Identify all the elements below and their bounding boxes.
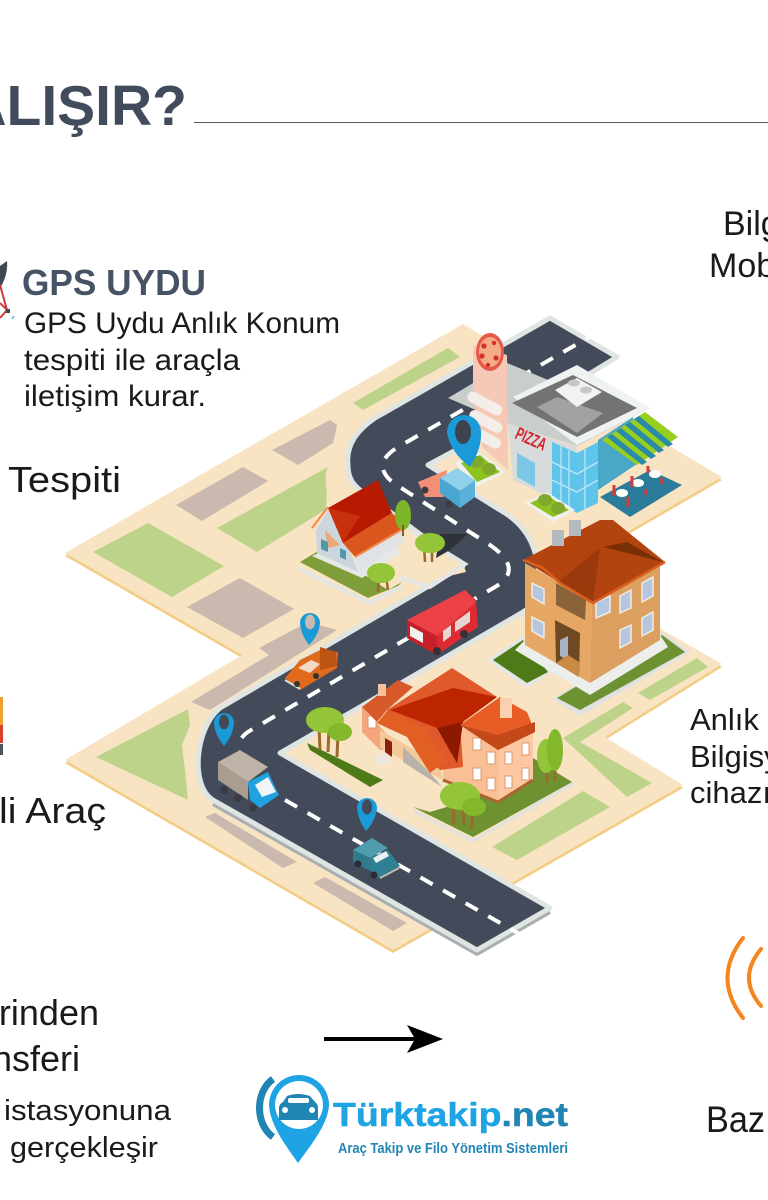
pizza sign text: PIZZA (512, 423, 550, 455)
arrow (324, 1025, 443, 1053)
left wall (525, 563, 592, 683)
pizza restaurant (448, 333, 682, 522)
tan house (487, 520, 690, 716)
logo signal arc (260, 1079, 273, 1137)
planter near glass (525, 492, 575, 522)
patio (600, 466, 682, 517)
tan house grass (487, 632, 690, 716)
logo wordmark: Türktakip .net (333, 1096, 568, 1133)
front wing roof (377, 710, 447, 773)
glass corner (552, 442, 598, 513)
text block: data transfer description (4, 1095, 172, 1164)
logo car (279, 1094, 318, 1120)
sign pills (465, 390, 504, 450)
vehicle: teal jeep (353, 838, 400, 878)
icon: vehicle fragment (0, 697, 3, 755)
roof (523, 520, 665, 603)
road (198, 318, 617, 950)
text block: instant info (690, 702, 768, 810)
vehicle: orange pickup (285, 647, 338, 690)
left wing roof (362, 680, 413, 722)
text block: GPS satellite: GPS Uydu Anlık Konum (24, 307, 340, 340)
windows (368, 716, 529, 790)
door (517, 453, 535, 487)
text block: data transfer heading: rinden (0, 992, 99, 1033)
doorway (555, 620, 580, 677)
logo tagline: Araç Takip ve Filo Yönetim Sistemleri (338, 1141, 568, 1157)
awning (602, 412, 678, 465)
icon: pin above truck (214, 713, 234, 746)
entry steps (372, 752, 392, 766)
sign pole (473, 345, 508, 470)
text block: computer or mobile (709, 205, 768, 285)
roof shadow (390, 688, 497, 763)
sign pizza (476, 333, 504, 371)
stairs (403, 747, 442, 787)
roof (512, 365, 650, 445)
centre wall (380, 730, 443, 780)
vehicle: grey truck (218, 750, 279, 812)
road kerb shadow (213, 804, 550, 954)
tower roof (460, 697, 535, 750)
canopy slab (448, 363, 650, 446)
text block: data transfer description: istasyonuna (4, 1095, 172, 1127)
balcony (556, 583, 586, 620)
text block: GPS satellite (22, 262, 340, 413)
peach house (307, 668, 574, 841)
tan house base (515, 635, 668, 695)
left wall tower (443, 727, 498, 802)
map base ground (65, 324, 722, 953)
map illustration (65, 318, 722, 954)
chimneys (552, 520, 581, 546)
trees (306, 707, 563, 830)
door (385, 738, 392, 757)
text block: GPS satellite: iletişim kurar. (24, 380, 206, 413)
logo inner circle (275, 1081, 323, 1129)
windows (532, 577, 653, 648)
text block: data transfer heading (0, 992, 99, 1079)
label: base station: Baz (706, 1099, 765, 1140)
icon: large location pin (447, 415, 481, 467)
vehicle: red bus (407, 590, 478, 655)
label: vehicle: li Araç (0, 790, 106, 831)
icon: pin above pickup (300, 613, 320, 645)
block: red-roof house (298, 480, 468, 603)
planter near sign (455, 452, 505, 487)
left wall (362, 707, 400, 750)
peach house grass (307, 743, 574, 841)
icon: pin above jeep (357, 798, 377, 831)
label: location detection: Tespiti (8, 459, 121, 500)
text block: GPS satellite: tespiti ile araçla (24, 344, 240, 377)
map lots (93, 348, 708, 931)
right window (598, 417, 640, 490)
main roof (387, 668, 497, 770)
icon: GPS satellite fragment (0, 261, 14, 319)
logo (260, 1075, 568, 1163)
vehicle: blue cargo truck (418, 468, 475, 508)
logo pin (269, 1075, 329, 1163)
text block: GPS satellite: GPS UYDU (22, 262, 206, 303)
right wall (590, 565, 660, 683)
road centre dashes (238, 332, 598, 940)
right wall tower (498, 730, 533, 802)
text block: data transfer description: gerçekleşir (10, 1132, 158, 1164)
icon: signal arcs (728, 938, 761, 1018)
chimneys (378, 684, 512, 718)
left wall (508, 423, 577, 510)
